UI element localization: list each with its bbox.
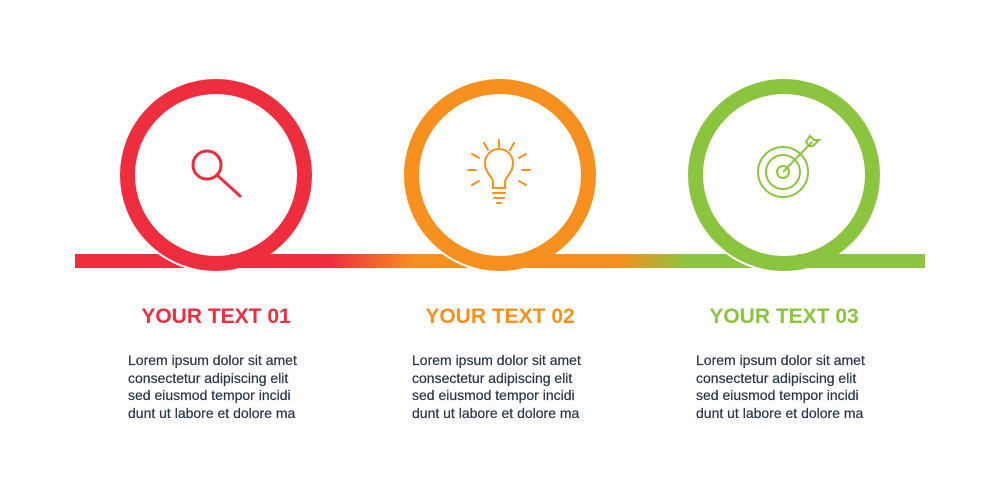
icon: light bulb [468, 140, 530, 203]
text block 02: dunt ut labore et dolore ma [412, 404, 579, 420]
text block 03: consectetur adipiscing elit [696, 370, 856, 386]
heading 01: YOUR TEXT 01 [141, 305, 291, 328]
circle: orange [412, 86, 588, 264]
baseline [75, 254, 925, 268]
icon: target [758, 136, 819, 197]
text block 03 [696, 352, 865, 420]
text block 02 [412, 352, 581, 420]
heading 02: YOUR TEXT 02 [425, 305, 575, 328]
text block 03: dunt ut labore et dolore ma [696, 404, 863, 420]
heading 03: YOUR TEXT 03 [709, 305, 859, 328]
text block 02: consectetur adipiscing elit [412, 370, 572, 386]
text block 03: Lorem ipsum dolor sit amet [696, 352, 865, 368]
text block 01: consectetur adipiscing elit [128, 370, 288, 386]
text block 01: Lorem ipsum dolor sit amet [128, 352, 297, 368]
text block 01: sed eiusmod tempor incidi [128, 387, 291, 403]
text block 03: sed eiusmod tempor incidi [696, 387, 859, 403]
circle: green [696, 86, 872, 264]
text block 02: sed eiusmod tempor incidi [412, 387, 575, 403]
circle: red [128, 86, 304, 264]
icon: magnifier [193, 151, 240, 196]
text block 01 [128, 352, 297, 420]
text block 02: Lorem ipsum dolor sit amet [412, 352, 581, 368]
text block 01: dunt ut labore et dolore ma [128, 404, 295, 420]
